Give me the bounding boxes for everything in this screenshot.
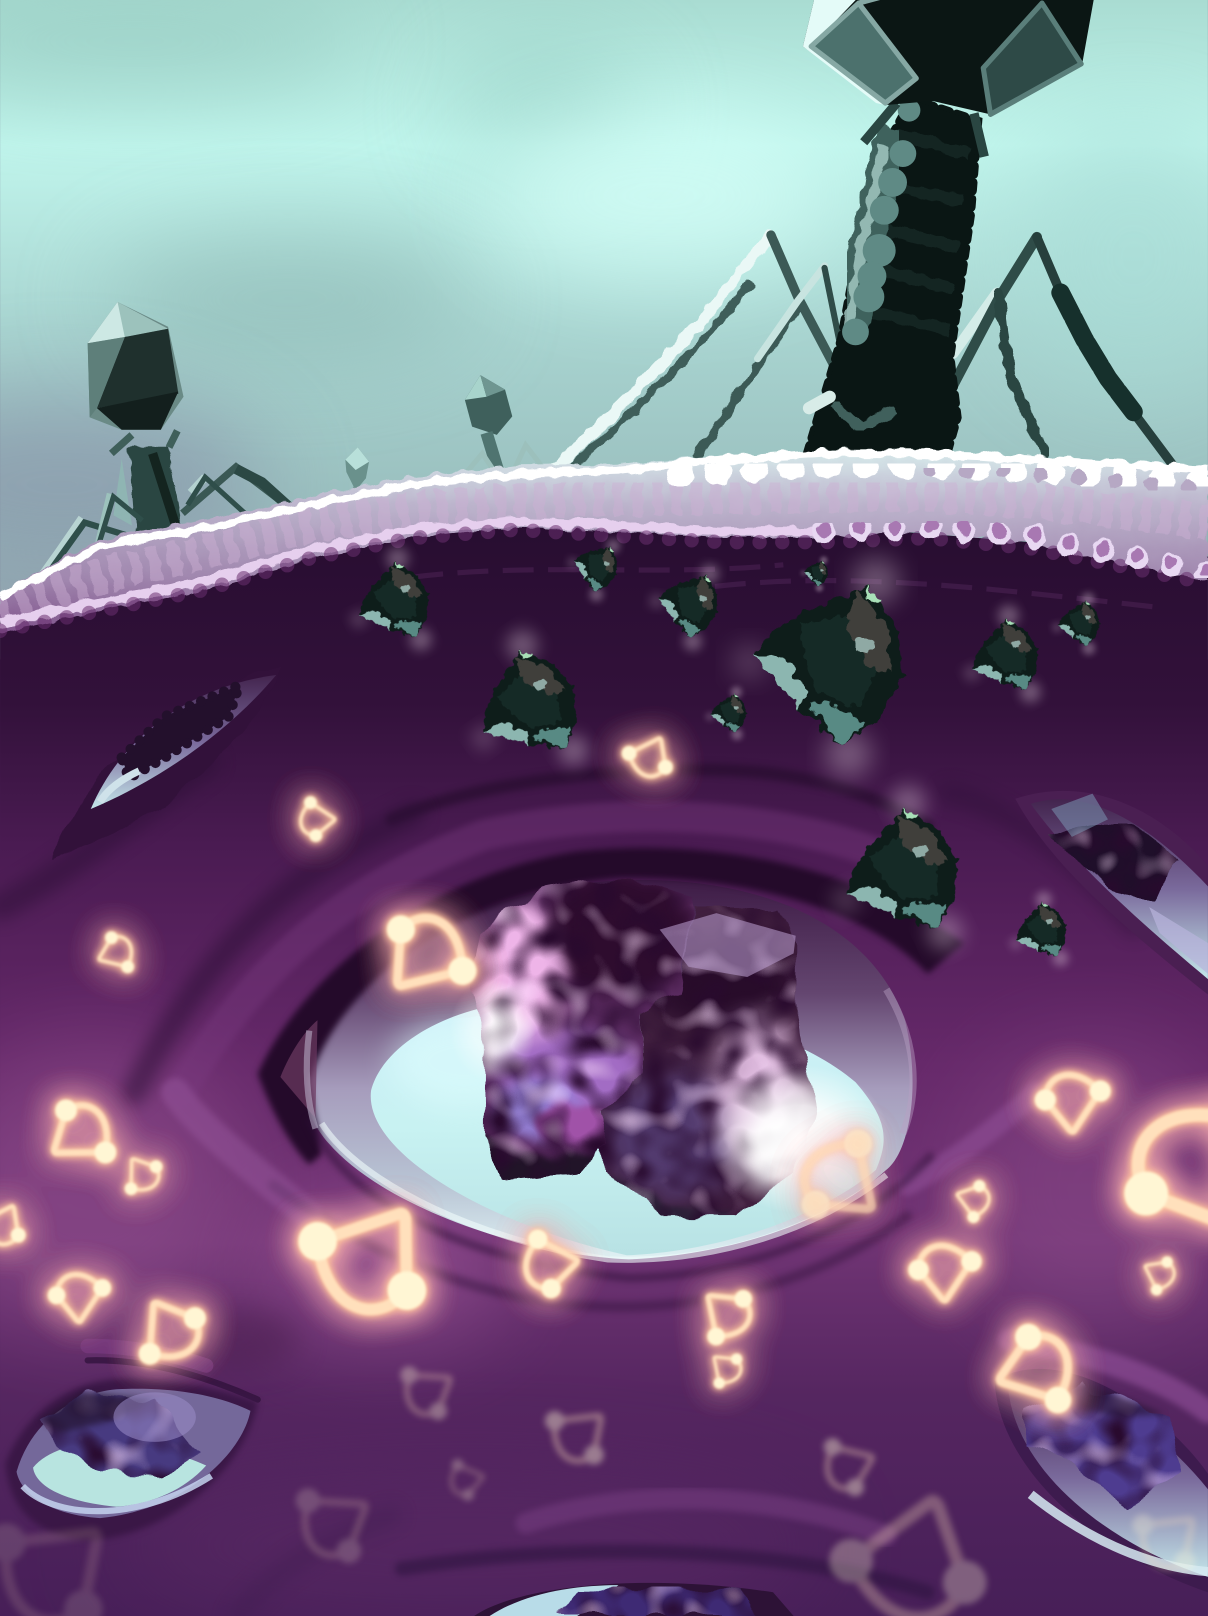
dark protein clumps near membrane <box>330 532 1105 987</box>
vesicle bottom <box>474 1583 794 1616</box>
vesicle: inner cyan fluid <box>371 999 884 1255</box>
large phage head <box>803 0 1095 114</box>
painted folds in cytoplasm <box>0 763 1208 1616</box>
large phage tail <box>808 99 984 453</box>
cell cytoplasm <box>0 515 1208 1616</box>
small phage left <box>39 302 293 580</box>
faded distant rings <box>0 1355 1208 1616</box>
vesicle: protein <box>40 1393 200 1475</box>
vesicle: lens body <box>305 880 913 1259</box>
clump <box>800 556 828 592</box>
membrane: lipid band <box>0 449 1208 633</box>
clump <box>434 623 612 808</box>
clump <box>800 778 990 987</box>
main channel vesicle <box>258 848 964 1278</box>
membrane: outer white edge <box>0 453 1208 596</box>
cell membrane <box>0 449 1208 633</box>
vesicle upper right <box>1015 791 1208 995</box>
vesicle: dark upper lid <box>258 848 964 1165</box>
vesicle: lower rim highlights <box>322 1123 886 1260</box>
clump <box>944 601 1057 724</box>
membrane: inner lilac band <box>0 521 825 622</box>
tiny distant phages <box>345 375 546 505</box>
vesicle: eyelid <box>5 1379 258 1541</box>
membrane: outer lipid heads <box>680 466 1208 484</box>
vesicle upper left <box>52 668 283 861</box>
clump <box>995 888 1081 983</box>
clump <box>701 686 751 745</box>
clump <box>645 559 721 653</box>
clump <box>731 558 902 778</box>
membrane: inner lipid heads <box>825 528 1208 573</box>
large phage legs <box>555 235 1175 470</box>
clump <box>330 543 449 673</box>
protein: translucent cap <box>660 913 796 977</box>
vesicle lower right <box>995 1369 1208 1592</box>
clump <box>1047 591 1105 660</box>
glowing lipid rings <box>0 738 1208 1428</box>
vesicle: cyan fluid <box>33 1443 206 1507</box>
protein: left lit subunit <box>470 878 694 1180</box>
protein: light flare <box>708 1065 889 1213</box>
background: teal sky <box>0 0 1208 660</box>
protein: right shaded subunit <box>598 906 817 1221</box>
vesicle lower left <box>5 1379 258 1541</box>
main channel protein <box>449 869 889 1226</box>
clump <box>561 532 622 604</box>
